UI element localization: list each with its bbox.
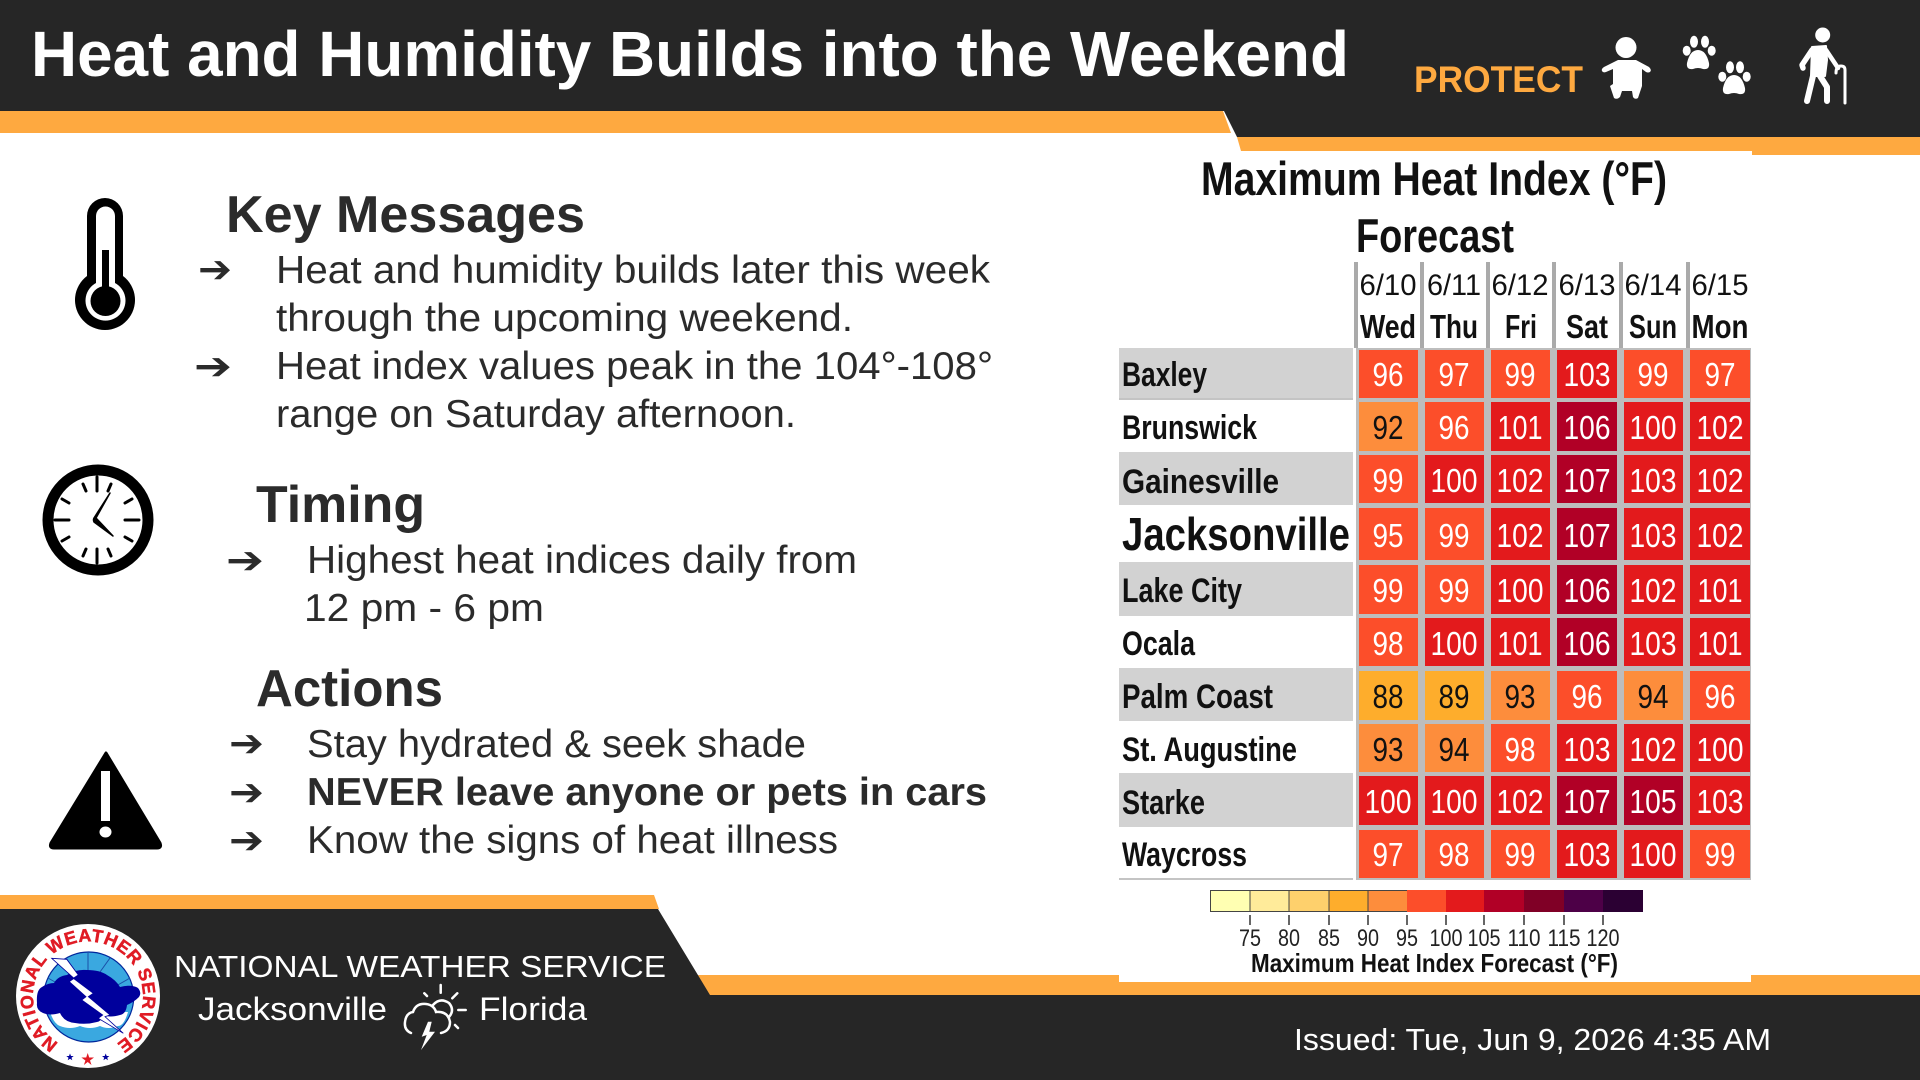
row: Ocala: 100	[1430, 625, 1478, 662]
office name: NATIONAL WEATHER SERVICE	[174, 949, 666, 984]
row: Jacksonville: 102	[1696, 517, 1744, 554]
actions list	[229, 721, 987, 862]
row: Lake City: 101	[1698, 572, 1742, 609]
row: Starke: 107	[1564, 783, 1610, 820]
row: Palm Coast: Palm Coast	[1122, 678, 1273, 716]
row: Brunswick: 102	[1696, 409, 1744, 446]
grid	[1356, 348, 1751, 880]
row: Jacksonville: 102	[1496, 517, 1544, 554]
row: Brunswick	[1119, 399, 1750, 451]
legend: color scale: 105	[1468, 925, 1500, 952]
key messages list: Heat index values peak in the 104°-108°	[276, 345, 993, 388]
row: Starke: Starke	[1122, 784, 1205, 822]
row: Lake City: 99	[1438, 572, 1470, 609]
row: Waycross: 97	[1372, 836, 1404, 873]
column headers: 6/11	[1427, 269, 1481, 302]
row: Baxley: 97	[1704, 356, 1736, 393]
legend: color scale: 95	[1396, 925, 1418, 952]
row: Jacksonville	[1122, 508, 1750, 560]
timing list: 12 pm - 6 pm	[304, 587, 544, 630]
icon: elderly person	[1802, 28, 1845, 103]
row: Baxley: 97	[1438, 356, 1470, 393]
column headers: 6/10	[1360, 269, 1416, 302]
row: Jacksonville: 95	[1372, 517, 1404, 554]
actions list: Know the signs of heat illness	[307, 819, 838, 862]
row: Jacksonville: Jacksonville	[1122, 508, 1350, 560]
footer banner	[0, 895, 1920, 1080]
legend: color scale: 115	[1548, 925, 1580, 952]
row: Ocala: 98	[1372, 625, 1404, 662]
column headers: Fri	[1505, 308, 1537, 345]
actions list: Stay hydrated & seek shade	[307, 723, 806, 766]
row: Waycross: 103	[1564, 836, 1610, 873]
panel: heat index forecast table	[1119, 151, 1751, 982]
row: Brunswick: 101	[1498, 409, 1542, 446]
actions list: ➔	[229, 721, 264, 765]
office name: Florida	[479, 991, 587, 1027]
legend: color scale: 75	[1239, 925, 1261, 952]
row: Brunswick: 100	[1630, 409, 1676, 446]
legend: color scale: 110	[1508, 925, 1540, 952]
row: Ocala: 106	[1564, 625, 1610, 662]
row: Baxley: 103	[1564, 356, 1610, 393]
column headers: Sat	[1566, 308, 1608, 345]
timing list	[226, 538, 857, 630]
icon: clock	[48, 470, 148, 570]
row: Jacksonville: 107	[1564, 517, 1610, 554]
row: Ocala: Ocala	[1122, 625, 1196, 663]
row: Brunswick: 96	[1438, 409, 1470, 446]
row: Waycross: 99	[1504, 836, 1536, 873]
icon: thermometer	[75, 198, 135, 330]
row: St. Augustine: 98	[1504, 731, 1536, 768]
row: Gainesville: 103	[1630, 462, 1676, 499]
row: Starke: 100	[1430, 783, 1478, 820]
row: Ocala: 101	[1498, 625, 1542, 662]
office name	[174, 949, 666, 1027]
row: Gainesville: 107	[1564, 462, 1610, 499]
row: Ocala	[1122, 618, 1750, 666]
legend: color scale: 90	[1357, 925, 1379, 952]
row: St. Augustine: 94	[1438, 731, 1470, 768]
row: Palm Coast: 88	[1372, 678, 1404, 715]
row: Gainesville: 102	[1696, 462, 1744, 499]
key messages list	[194, 247, 993, 436]
row: St. Augustine: 93	[1372, 731, 1404, 768]
row: Palm Coast: 96	[1572, 678, 1602, 715]
row: Starke	[1119, 773, 1750, 827]
row: Baxley: Baxley	[1122, 356, 1207, 394]
row: Baxley: 99	[1638, 356, 1668, 393]
heading: actions: Actions	[256, 660, 443, 718]
title: Heat and Humidity Builds into the Weekend	[31, 18, 1349, 90]
row: Gainesville: Gainesville	[1122, 463, 1279, 501]
header banner	[0, 0, 1920, 155]
row: Baxley: 96	[1372, 356, 1404, 393]
row: Lake City: Lake City	[1122, 572, 1242, 610]
column headers: 6/13	[1558, 269, 1616, 302]
row: Starke: 102	[1496, 783, 1544, 820]
issued timestamp: Issued: Tue, Jun 9, 2026 4:35 AM	[1294, 1022, 1771, 1057]
row: Palm Coast	[1119, 668, 1750, 721]
column headers: Sun	[1629, 308, 1677, 345]
actions list: NEVER leave anyone or pets in cars	[307, 771, 987, 814]
row: Waycross: 98	[1438, 836, 1470, 873]
column headers: 6/12	[1492, 269, 1548, 302]
row: Lake City: 106	[1564, 572, 1610, 609]
icon: pet paws	[1683, 36, 1751, 94]
protect label: PROTECT	[1414, 59, 1583, 100]
row: Starke: 100	[1364, 783, 1412, 820]
key messages list: ➔	[198, 247, 232, 291]
row: St. Augustine: 100	[1696, 731, 1744, 768]
row: Jacksonville: 103	[1630, 517, 1676, 554]
row: Ocala: 101	[1698, 625, 1742, 662]
row: Gainesville: 99	[1372, 462, 1404, 499]
key messages list: Heat and humidity builds later this week	[276, 249, 991, 292]
icon: storm cloud and sun	[405, 985, 466, 1050]
column headers	[1356, 262, 1748, 348]
row: Starke: 103	[1696, 783, 1744, 820]
row: Starke: 105	[1630, 783, 1676, 820]
row: Baxley: 99	[1504, 356, 1536, 393]
row: Waycross: Waycross	[1122, 836, 1247, 874]
legend: color scale: 80	[1278, 925, 1300, 952]
timing list: Highest heat indices daily from	[307, 539, 857, 582]
actions list: ➔	[229, 770, 264, 814]
row: Jacksonville: 99	[1438, 517, 1470, 554]
column headers: Wed	[1360, 308, 1416, 345]
row: Palm Coast: 89	[1438, 678, 1470, 715]
row: Lake City: 102	[1630, 572, 1676, 609]
row: Waycross	[1119, 830, 1750, 879]
row: Brunswick: Brunswick	[1122, 409, 1257, 447]
key messages list: through the upcoming weekend.	[276, 297, 853, 340]
row: St. Augustine: 103	[1564, 731, 1610, 768]
row: Lake City: 100	[1496, 572, 1544, 609]
legend: color scale: 120	[1586, 925, 1620, 952]
row: Baxley	[1119, 348, 1750, 399]
row: Ocala: 103	[1630, 625, 1676, 662]
table title: Maximum Heat Index (°F)	[1201, 152, 1667, 205]
legend: color scale: Maximum Heat Index Forecast (°F)	[1251, 948, 1618, 978]
row: St. Augustine: 102	[1630, 731, 1676, 768]
row: Palm Coast: 96	[1704, 678, 1736, 715]
icon: baby	[1602, 37, 1651, 99]
row: Lake City	[1119, 562, 1750, 616]
heading: timing: Timing	[256, 476, 425, 534]
key messages list: range on Saturday afternoon.	[276, 393, 796, 436]
row: Gainesville	[1119, 452, 1750, 505]
icon: NWS logo: NATIONAL WEATHER SERVICE	[20, 928, 156, 1054]
row: Lake City: 99	[1372, 572, 1404, 609]
legend: color scale: 100	[1430, 925, 1462, 952]
legend: color scale: 85	[1318, 925, 1340, 952]
key messages list: ➔	[194, 344, 232, 388]
column headers: 6/15	[1692, 269, 1748, 302]
column headers: Thu	[1430, 308, 1478, 345]
row: Gainesville: 100	[1430, 462, 1478, 499]
table title	[1201, 152, 1667, 262]
column headers: Mon	[1692, 308, 1748, 345]
legend: color scale	[1210, 890, 1643, 978]
row: Waycross: 99	[1704, 836, 1736, 873]
row: Palm Coast: 94	[1638, 678, 1668, 715]
row: Waycross: 100	[1630, 836, 1676, 873]
office name: Jacksonville	[198, 991, 387, 1027]
icon: warning triangle	[50, 753, 161, 848]
row: Gainesville: 102	[1496, 462, 1544, 499]
actions list: ➔	[229, 818, 264, 862]
row: Palm Coast: 93	[1504, 678, 1536, 715]
row: St. Augustine: St. Augustine	[1122, 731, 1297, 769]
heading: key messages: Key Messages	[226, 186, 585, 244]
row: St. Augustine	[1122, 724, 1750, 772]
column headers: 6/14	[1624, 269, 1682, 302]
row: Brunswick: 106	[1564, 409, 1610, 446]
table title: Forecast	[1356, 209, 1514, 262]
timing list: ➔	[226, 538, 264, 582]
row: Brunswick: 92	[1372, 409, 1404, 446]
